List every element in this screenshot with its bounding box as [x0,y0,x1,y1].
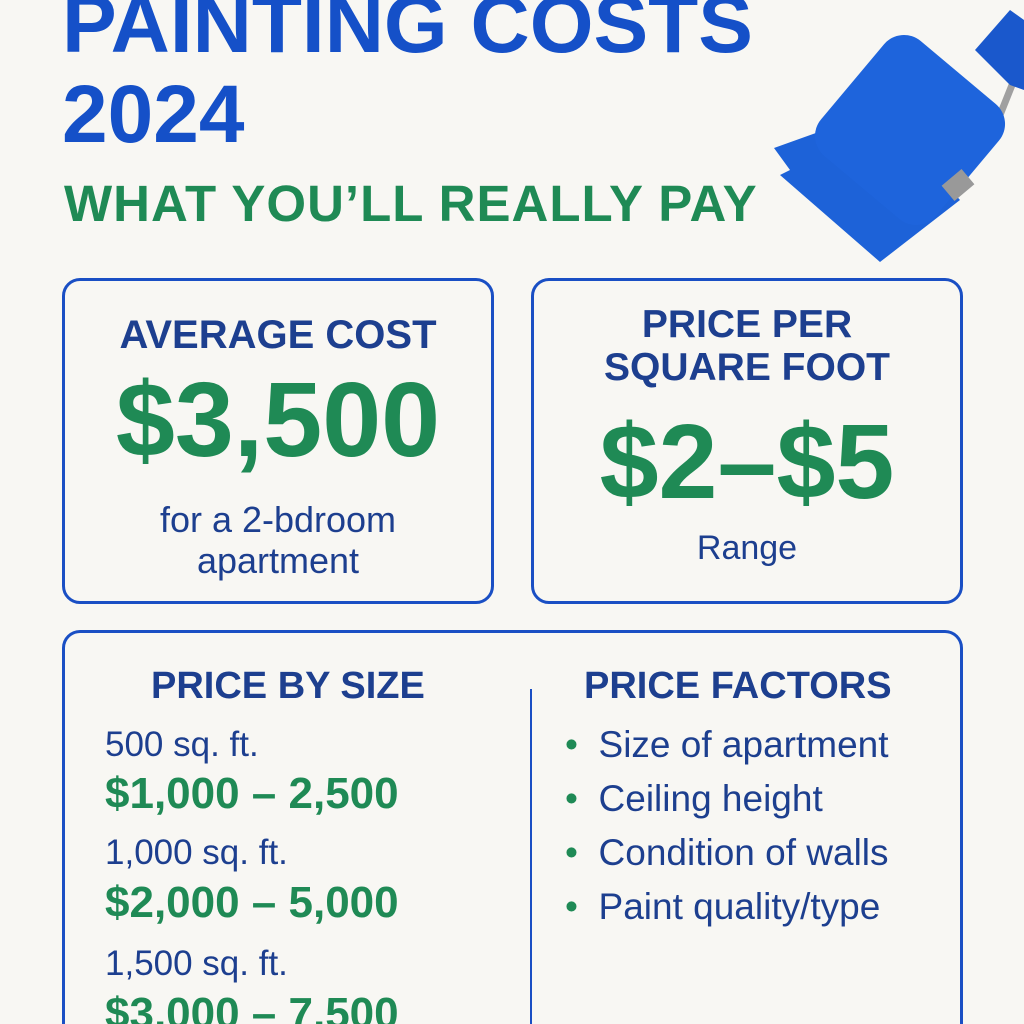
panel: size and factors: $1,000 – 2,500 [105,769,399,818]
panel: size and factors: 1,500 sq. ft. [105,944,288,983]
value: $3,500 [116,361,440,479]
heading: PRICE PER [642,303,852,346]
caption: apartment [197,540,359,581]
heading [604,303,890,389]
caption [160,499,396,581]
caption: for a 2-bdroom [160,499,396,540]
panel: average cost [62,278,494,604]
panel: size and factors: $2,000 – 5,000 [105,878,399,927]
caption: Range [697,529,797,567]
panel: size and factors [62,630,963,1024]
icon: paint roller [774,10,1024,262]
heading: price factors: PRICE FACTORS [584,665,892,707]
heading: price by size: PRICE BY SIZE [151,665,425,707]
subtitle: WHAT YOU’LL REALLY PAY [64,175,758,232]
panel: price per square foot [531,278,963,604]
price by size list [105,725,399,1024]
title [62,0,753,160]
heading: AVERAGE COST [119,313,437,357]
price factors list: • Size of apartment • Ceiling height • Condition of walls • Paint quality/type [565,724,889,927]
title: 2024 [62,69,244,160]
heading: SQUARE FOOT [604,346,890,389]
panel: size and factors: 500 sq. ft. [105,725,259,764]
panel: size and factors: 1,000 sq. ft. [105,833,288,872]
value: $2–$5 [600,403,894,521]
